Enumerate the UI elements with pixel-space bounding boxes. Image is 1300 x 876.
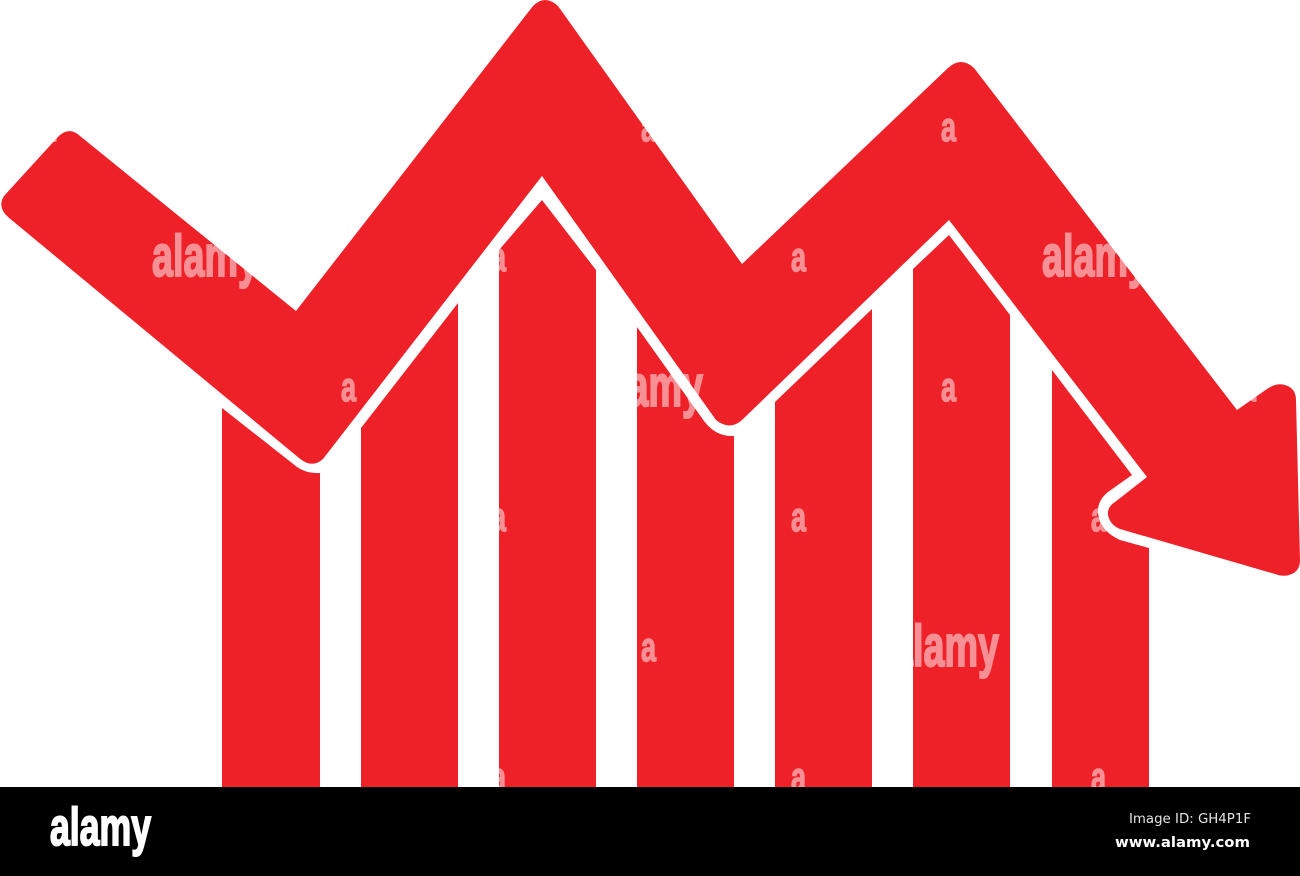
watermark: small marks: a: [1091, 754, 1107, 800]
bar 1: [222, 408, 320, 787]
watermark: right: alamy: [1042, 224, 1149, 289]
bar 7: [1052, 370, 1149, 787]
watermark: small marks: a: [491, 234, 507, 280]
watermark: small marks: a: [1241, 364, 1257, 410]
watermark: small marks: a: [791, 494, 807, 540]
zigzag downward arrow: [1, 0, 1300, 576]
watermark: small marks: a: [491, 754, 507, 800]
watermark: left: alamy: [152, 224, 259, 289]
watermark: small marks: a: [791, 234, 807, 280]
website: www.alamy.com: [1115, 834, 1250, 851]
watermark: small marks: a: [641, 104, 657, 150]
watermark: center: alamy: [596, 354, 703, 419]
bar 5: [775, 309, 872, 787]
watermark: small marks: a: [941, 364, 957, 410]
bar 2: [361, 303, 458, 787]
watermark text: [41, 104, 1257, 800]
footer logo: alamy: [50, 798, 151, 857]
watermark: small marks: [41, 104, 1257, 800]
bar 3: [499, 200, 596, 787]
bar 4: [637, 327, 734, 787]
watermark: small marks: a: [491, 494, 507, 540]
watermark: lower: alamy: [892, 614, 999, 679]
footer bar: [0, 787, 1300, 876]
watermark: small marks: a: [41, 104, 57, 150]
bar 6: [913, 235, 1010, 787]
watermark: small marks: a: [791, 754, 807, 800]
bar chart: [222, 200, 1149, 787]
watermark: small marks: a: [641, 624, 657, 670]
image id: Image ID: GH4P1F: [1129, 812, 1251, 827]
watermark: small marks: a: [1091, 494, 1107, 540]
watermark: small marks: a: [341, 364, 357, 410]
watermark: small marks: a: [941, 104, 957, 150]
